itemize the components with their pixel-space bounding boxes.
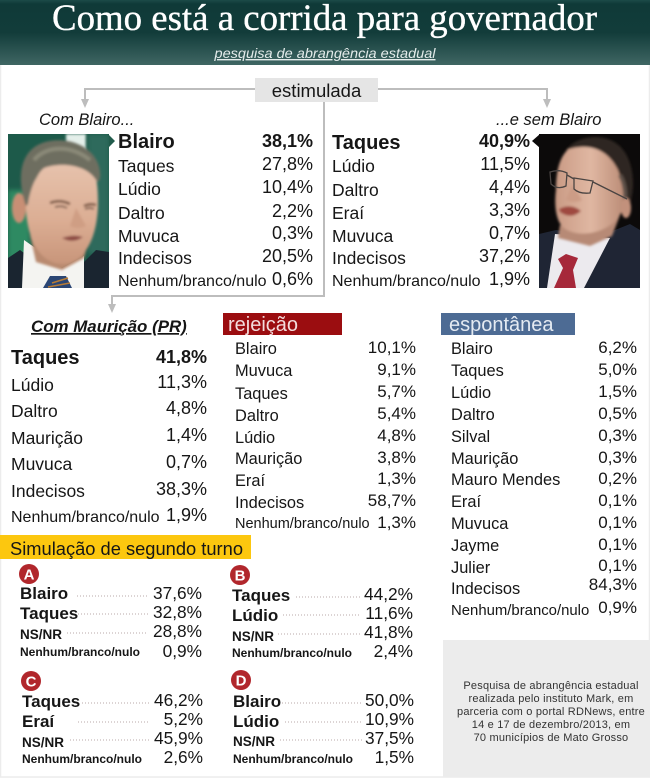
panel: simulação A	[19, 564, 202, 661]
panel: Com Maurição	[11, 317, 207, 526]
panel: simulação B: 2,4%	[374, 641, 413, 661]
list: espontânea: Indecisos	[451, 580, 520, 598]
arrow: estimulada to sem Blairo	[378, 89, 551, 108]
text: sem Blairo: ...e sem Blairo	[496, 111, 601, 129]
panel: simulação D: 50,0%	[365, 690, 414, 710]
list: espontânea: 1,5%	[598, 382, 637, 401]
jacket	[8, 250, 109, 288]
list: rejeição: Maurição	[235, 450, 302, 468]
panel: simulação C: Eraí	[22, 712, 55, 731]
panel: simulação A: NS/NR	[20, 627, 62, 642]
nose	[71, 210, 84, 228]
panel: simulação D: 10,9%	[365, 709, 414, 729]
list: rejeição: Taques	[235, 385, 288, 403]
list: rejeição: Lúdio	[235, 429, 275, 447]
list: rejeição: 1,3%	[377, 513, 416, 532]
list: com Blairo: Muvuca	[118, 226, 180, 246]
heading: Simulação de segundo turno: Simulação de segundo turno	[10, 538, 243, 559]
callout: nota metodológica: 70 municípios de Mato Grosso	[474, 732, 628, 744]
panel: simulação B: Lúdio	[232, 606, 278, 625]
panel: simulação C: Nenhum/branco/nulo	[22, 752, 142, 766]
list: espontânea: 84,3%	[589, 575, 637, 594]
list: rejeição: 9,1%	[377, 360, 416, 379]
list: rejeição: Blairo	[235, 340, 277, 358]
arrow: estimulada to Com Blairo	[81, 89, 255, 108]
badge A: A	[24, 566, 35, 584]
list: rejeição: Muvuca	[235, 362, 293, 380]
list: espontânea: Taques	[451, 362, 504, 380]
list: Com Maurição: Lúdio	[11, 375, 54, 395]
list: com Blairo: 0,6%	[272, 269, 313, 289]
glasses	[550, 171, 627, 199]
list: Com Maurição: Nenhum/branco/nulo	[11, 509, 160, 526]
list: espontânea: Eraí	[451, 493, 482, 511]
list: Com Maurição: 11,3%	[157, 372, 207, 392]
panel: simulação A: Taques	[20, 604, 78, 623]
list: com Blairo: 10,4%	[262, 177, 313, 197]
heading: rejeição	[223, 313, 342, 336]
list: rejeição: Indecisos	[235, 494, 304, 512]
panel: simulação D: 1,5%	[375, 747, 414, 767]
header banner	[0, 0, 650, 65]
face	[555, 144, 626, 234]
tie	[43, 276, 72, 288]
list: espontânea	[451, 338, 637, 619]
list: Com Maurição	[11, 347, 207, 526]
list: sem Blairo: Nenhum/branco/nulo	[332, 273, 481, 290]
panel: simulação D	[231, 670, 414, 767]
panel: simulação B: Nenhum/branco/nulo	[232, 646, 352, 660]
neck	[558, 215, 620, 246]
photo: Taques portrait	[539, 134, 640, 288]
list: Com Maurição: Maurição	[11, 428, 83, 448]
brows	[50, 201, 70, 204]
list: com Blairo: 2,2%	[272, 201, 313, 221]
list: espontânea: 0,5%	[598, 404, 637, 423]
shirt	[547, 234, 610, 288]
list: sem Blairo: Muvuca	[332, 226, 394, 246]
panel: simulação C: 5,2%	[164, 709, 203, 729]
list: rejeição: 58,7%	[368, 491, 416, 510]
panel: simulação C: 46,2%	[154, 690, 203, 710]
estimulada label: estimulada	[272, 80, 362, 101]
panel: simulação B: 44,2%	[364, 584, 413, 604]
list: sem Blairo: Taques	[332, 132, 401, 154]
text: Com Blairo: Com Blairo...	[39, 111, 134, 129]
ear	[621, 198, 631, 218]
list: Com Maurição: 41,8%	[156, 347, 207, 367]
list: rejeição: 10,1%	[368, 338, 416, 357]
callout: nota metodológica: parceria com o portal RDNews, entre	[457, 706, 645, 718]
list: espontânea: Nenhum/branco/nulo	[451, 603, 589, 619]
panel: simulação A: 32,8%	[153, 602, 202, 622]
panel: simulação B: Taques	[232, 586, 290, 605]
panel: rejeição	[223, 313, 416, 532]
callout: nota metodológica: Pesquisa de abrangência estadual	[463, 680, 639, 692]
list: Com Maurição: 0,7%	[166, 452, 207, 472]
face	[26, 164, 98, 264]
list: sem Blairo: Eraí	[332, 203, 364, 223]
panel: simulação D: NS/NR	[233, 734, 275, 749]
panel: simulação A: Nenhum/branco/nulo	[20, 645, 140, 659]
mouth	[559, 206, 581, 216]
list: espontânea: Jayme	[451, 537, 499, 555]
list: Com Maurição: Taques	[11, 347, 80, 369]
list: sem Blairo: 40,9%	[479, 131, 530, 151]
badge B	[230, 565, 250, 585]
list: espontânea: 0,2%	[598, 469, 637, 488]
list: Com Maurição: 4,8%	[166, 398, 207, 418]
list: rejeição: 1,3%	[377, 469, 416, 488]
panel: simulação D: Lúdio	[233, 712, 279, 731]
list: espontânea: 0,1%	[598, 491, 637, 510]
photo: Blairo portrait	[8, 134, 109, 288]
panel: simulação A: Blairo	[20, 584, 68, 603]
badge D	[231, 670, 251, 690]
panel: simulação C: 2,6%	[164, 747, 203, 767]
panel: simulação B	[230, 565, 413, 661]
list: com Blairo: 27,8%	[262, 154, 313, 174]
list: espontânea: 0,3%	[598, 448, 637, 467]
list: espontânea: Maurição	[451, 450, 518, 468]
list: rejeição: 5,7%	[377, 382, 416, 401]
list: rejeição: Daltro	[235, 407, 279, 425]
panel: simulação C	[21, 671, 203, 767]
estimulada label	[255, 78, 378, 102]
hair	[566, 137, 633, 208]
panel: simulação A: 37,6%	[153, 583, 202, 603]
list: com Blairo: Blairo	[118, 131, 175, 153]
list: espontânea: 0,9%	[598, 598, 637, 617]
list: espontânea: 0,1%	[598, 513, 637, 532]
shirt	[22, 240, 84, 288]
pointer: Blairo	[108, 134, 115, 148]
list: espontânea: 6,2%	[598, 338, 637, 357]
nose	[568, 186, 582, 202]
list: espontânea: Daltro	[451, 406, 495, 424]
tie	[554, 254, 578, 288]
list: Com Maurição: Muvuca	[11, 454, 73, 474]
list: Com Maurição: 1,4%	[166, 425, 207, 445]
list: espontânea: Julier	[451, 559, 491, 577]
list: sem Blairo	[332, 131, 530, 290]
list: com Blairo: Taques	[118, 156, 175, 176]
callout: nota metodológica	[443, 640, 650, 777]
neck shadow	[30, 235, 90, 270]
list: rejeição: 3,8%	[377, 448, 416, 467]
list: Com Maurição: 38,3%	[156, 479, 207, 499]
arrow: estimulada to Com Maurição	[108, 101, 324, 313]
panel: simulação D: Nenhum/branco/nulo	[233, 752, 353, 766]
list: sem Blairo: 1,9%	[489, 269, 530, 289]
badge C: C	[26, 674, 37, 690]
hair	[21, 140, 100, 206]
panel: simulação B: 11,6%	[365, 603, 413, 623]
list: com Blairo	[118, 131, 313, 290]
list: Com Maurição: Daltro	[11, 401, 58, 421]
list: Com Maurição: Indecisos	[11, 481, 85, 501]
panel: espontânea	[441, 313, 637, 619]
heading: espontânea: espontânea	[449, 314, 554, 336]
list: sem Blairo: 4,4%	[489, 177, 530, 197]
badge B: B	[235, 568, 246, 584]
list: espontânea: Muvuca	[451, 515, 509, 533]
eyes	[55, 206, 67, 208]
list: rejeição: 4,8%	[377, 426, 416, 445]
badge A	[19, 564, 39, 584]
list: sem Blairo: 37,2%	[479, 246, 530, 266]
badge C	[21, 671, 41, 691]
heading: Com Maurição: Com Maurição (PR)	[31, 317, 187, 336]
badge D: D	[236, 672, 247, 690]
ear	[12, 193, 26, 223]
heading: rejeição: rejeição	[228, 314, 298, 336]
panel: simulação C: Taques	[22, 692, 80, 711]
list: com Blairo: Indecisos	[118, 248, 192, 268]
list: espontânea: Blairo	[451, 340, 493, 358]
list: Com Maurição: 1,9%	[166, 505, 207, 525]
list: sem Blairo: Daltro	[332, 180, 379, 200]
panel: simulação B: NS/NR	[232, 629, 274, 644]
list: com Blairo: Lúdio	[118, 179, 161, 199]
panel: simulação B: 41,8%	[364, 622, 413, 642]
list: sem Blairo: 11,5%	[480, 154, 530, 174]
list: rejeição: Eraí	[235, 472, 266, 490]
list: com Blairo: Daltro	[118, 203, 165, 223]
callout: nota metodológica: 14 e 17 de dezembro/2013, em	[472, 719, 630, 731]
list: rejeição: Nenhum/branco/nulo	[235, 516, 370, 532]
subtitle: pesquisa de abrangência estadual	[213, 45, 436, 61]
callout: nota metodológica: realizada pelo instituto Mark, em	[469, 693, 633, 705]
list: espontânea: 5,0%	[598, 360, 637, 379]
list: sem Blairo: 0,7%	[489, 223, 530, 243]
list: espontânea: 0,1%	[598, 556, 637, 575]
panel: simulação A: 0,9%	[163, 641, 202, 661]
mouth	[62, 236, 83, 241]
list: sem Blairo: Indecisos	[332, 248, 406, 268]
pointer: Taques	[532, 134, 540, 148]
panel: simulação C: NS/NR	[22, 735, 64, 750]
list: rejeição: 5,4%	[377, 404, 416, 423]
list: com Blairo: Nenhum/branco/nulo	[118, 273, 267, 290]
panel: simulação D: Blairo	[233, 692, 281, 711]
panel: simulação D: 37,5%	[365, 728, 414, 748]
list: espontânea: Mauro Mendes	[451, 471, 560, 489]
list: espontânea: 0,1%	[598, 535, 637, 554]
list: sem Blairo: Lúdio	[332, 156, 375, 176]
panel: simulação C: 45,9%	[154, 728, 203, 748]
list: espontânea: Lúdio	[451, 384, 491, 402]
jacket	[539, 224, 640, 288]
list: espontânea: 0,3%	[598, 426, 637, 445]
list: com Blairo: 38,1%	[262, 131, 313, 151]
list: rejeição	[235, 338, 416, 532]
list: espontânea: Silval	[451, 428, 490, 446]
list: com Blairo: 0,3%	[272, 223, 313, 243]
list: sem Blairo: 3,3%	[489, 200, 530, 220]
list: com Blairo: 20,5%	[262, 246, 313, 266]
panel: simulação A: 28,8%	[153, 621, 202, 641]
